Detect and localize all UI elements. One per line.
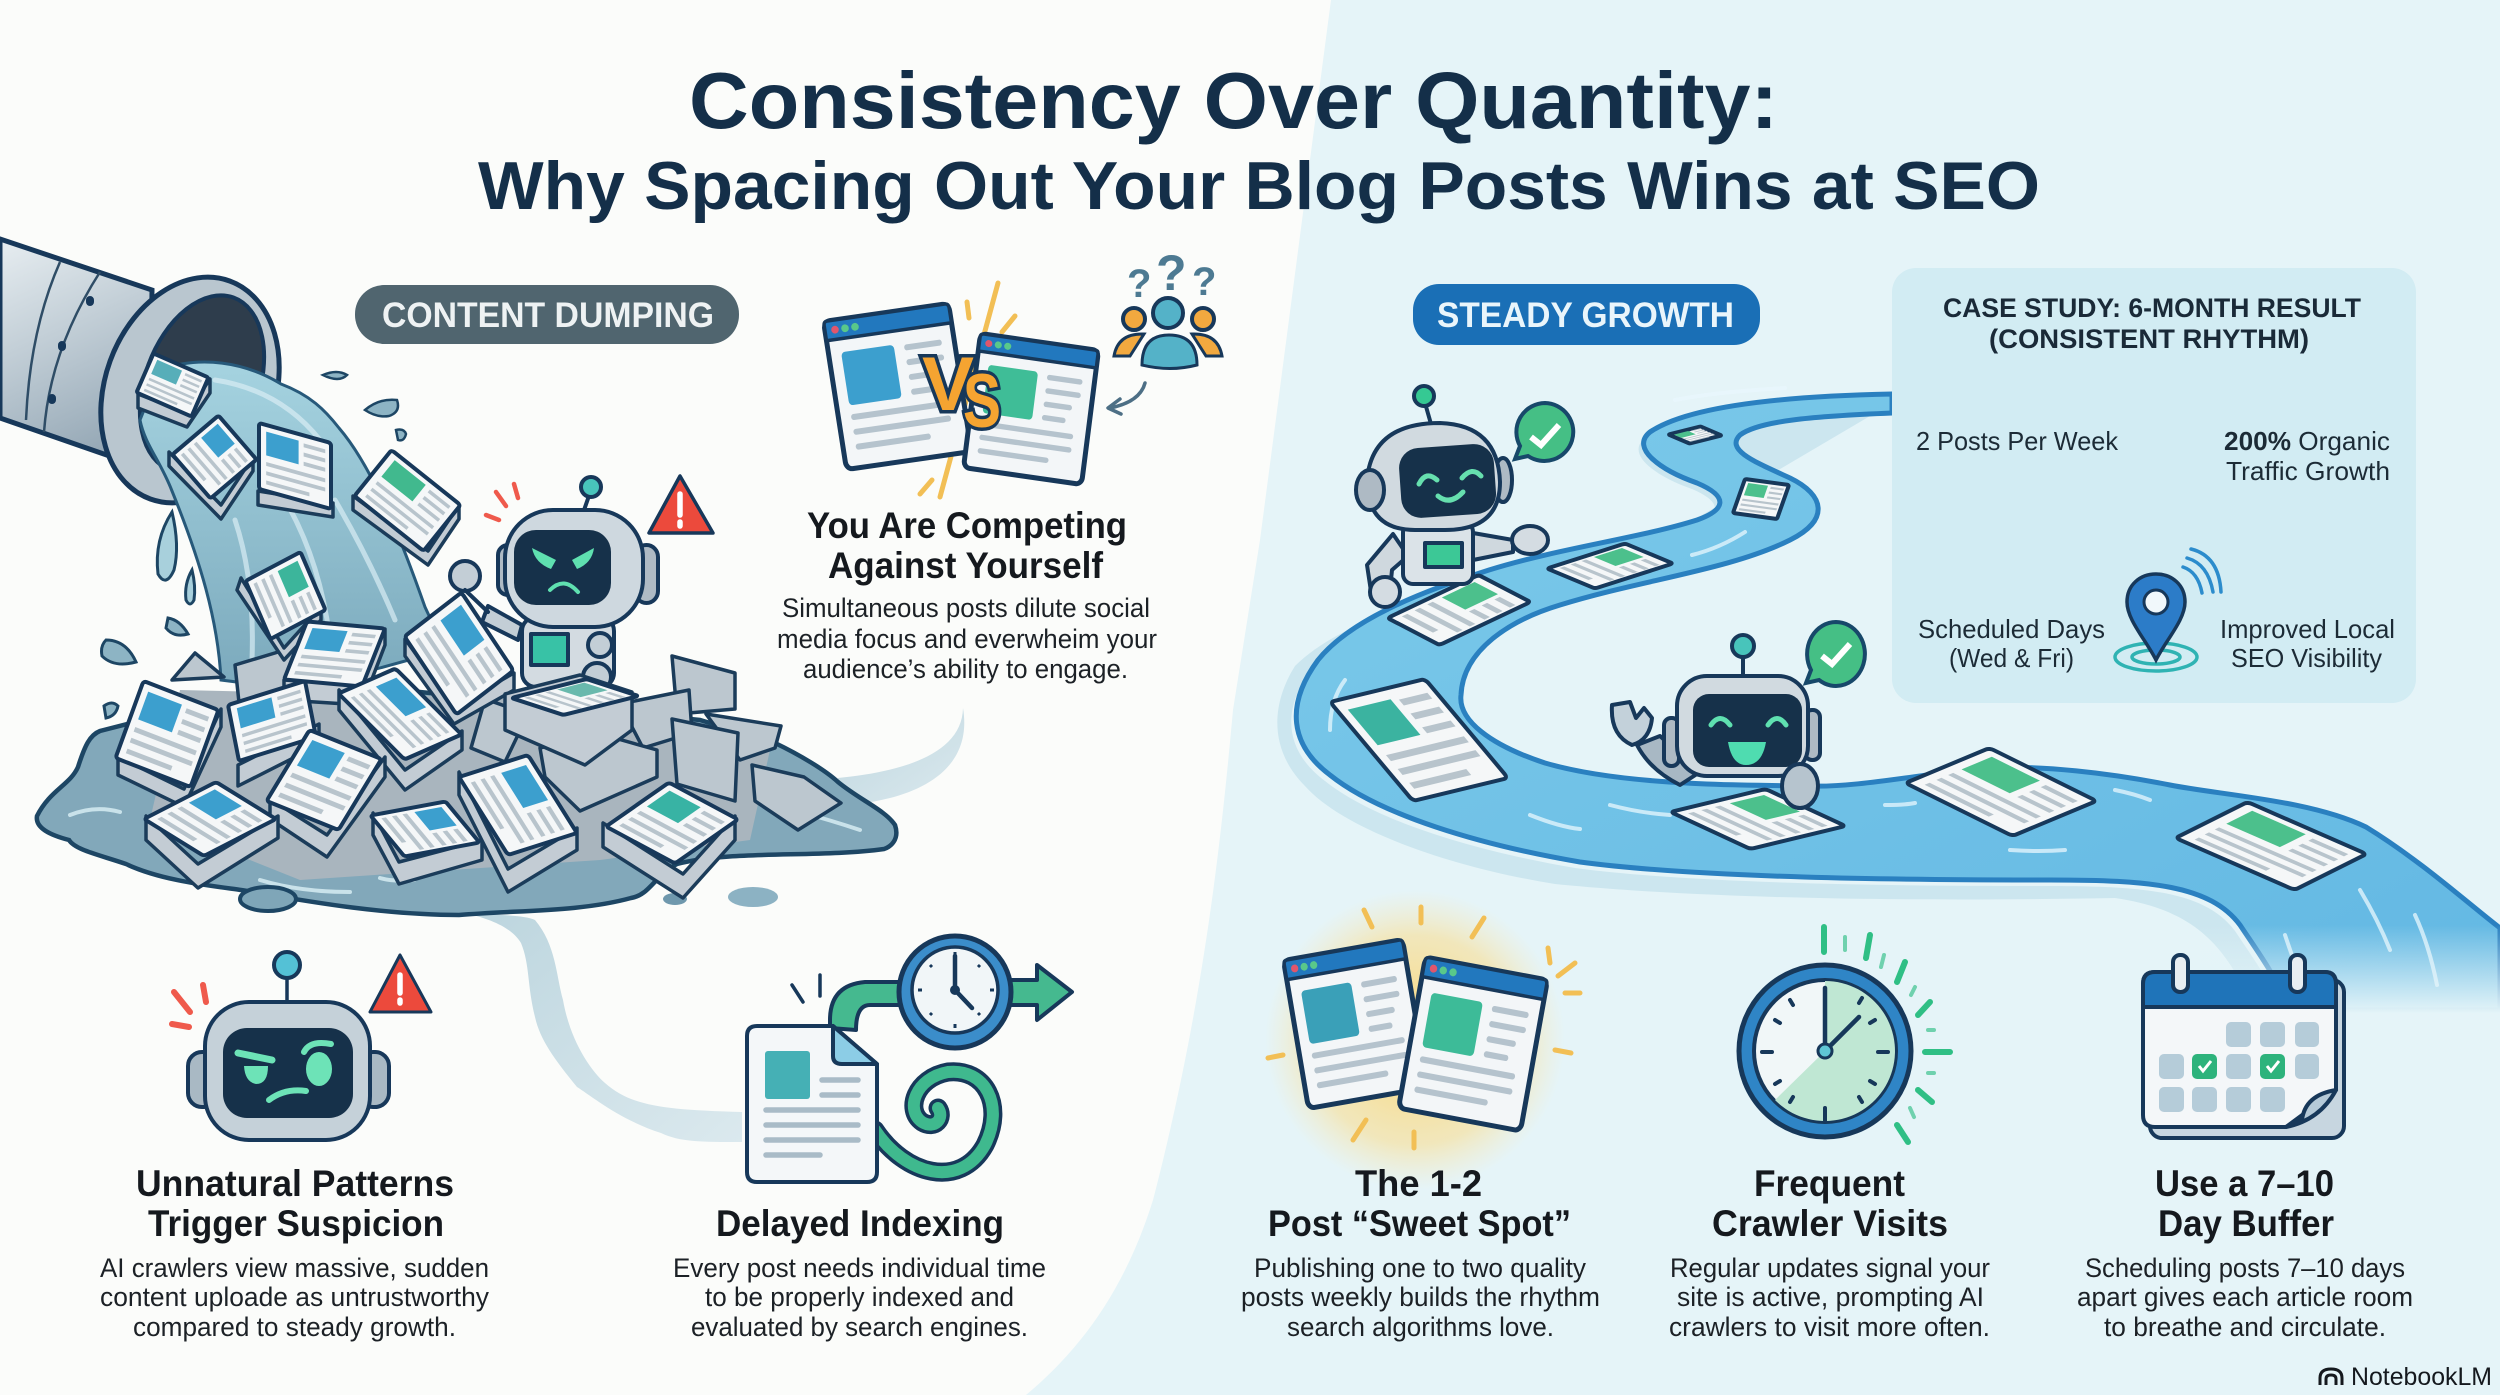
river fade	[2200, 925, 2500, 1013]
text: frequent crawler visits: Crawler Visits	[1712, 1203, 1948, 1244]
warning sign	[370, 955, 431, 1012]
icon: location pin	[2115, 549, 2221, 671]
text: sweet spot: The 1-2	[1355, 1163, 1482, 1204]
pipe collar	[70, 252, 310, 528]
icon: competing browsers versus: V	[922, 342, 974, 427]
stat: posts per week: 2 Posts Per Week	[1916, 426, 2119, 456]
puddle highlights	[70, 809, 860, 892]
panel heading: (CONSISTENT RHYTHM)	[1989, 324, 2309, 354]
text: unnatural patterns	[100, 1163, 489, 1342]
pipe mouth	[117, 278, 287, 490]
icon: confused audience	[1114, 245, 1222, 368]
text: sweet spot: posts weekly builds the rhythm	[1241, 1282, 1600, 1312]
text: frequent crawler visits: crawlers to visit more often.	[1669, 1312, 1990, 1342]
text: delayed indexing: to be properly indexed and	[705, 1282, 1014, 1312]
text: use a buffer: Scheduling posts 7–10 days	[2085, 1253, 2405, 1283]
icon: confused audience: ?	[1156, 245, 1187, 301]
text: unnatural patterns: Unnatural Patterns	[136, 1163, 454, 1204]
icon: frequent crawler clock	[1739, 927, 1950, 1142]
text: frequent crawler visits: site is active, prompting AI	[1677, 1282, 1984, 1312]
water stream	[140, 362, 445, 690]
post under lower robot	[1670, 789, 1846, 849]
pipe band	[26, 262, 100, 432]
robot: happy upper	[1356, 386, 1548, 607]
robot: happy lower	[1612, 635, 1820, 808]
panel: case study	[1892, 268, 2416, 703]
posts floating on river	[1330, 426, 2366, 890]
illustration: content dumping pipe and pile	[0, 239, 896, 915]
text: unnatural patterns: Trigger Suspicion	[148, 1203, 444, 1244]
ribbon: puddle to competing text	[820, 708, 964, 806]
text: sweet spot	[1241, 1163, 1600, 1342]
pill: content dumping	[355, 285, 739, 344]
pile of posts	[116, 354, 738, 898]
text: frequent crawler visits: Regular updates signal your	[1670, 1253, 1990, 1283]
pipe rivets	[52, 300, 90, 400]
text: you are competing against yourself	[777, 505, 1157, 684]
green swirl	[875, 1072, 993, 1172]
text: delayed indexing: evaluated by search engines.	[691, 1312, 1028, 1342]
title: Why Spacing Out Your Blog Posts Wins at SEO	[478, 148, 2040, 224]
icon: suspicious robot	[188, 952, 389, 1140]
text: use a buffer: Day Buffer	[2158, 1203, 2334, 1244]
text: you are competing against yourself: Against Yourself	[828, 545, 1104, 586]
stat: scheduled days	[1918, 614, 2105, 673]
pipe body	[0, 239, 152, 470]
stat: traffic growth	[2224, 426, 2390, 486]
stat: local seo: SEO Visibility	[2231, 643, 2382, 673]
title: Consistency Over Quantity:	[689, 56, 1778, 145]
icon: confused audience: ?	[1192, 260, 1216, 304]
rubble blocks	[150, 646, 841, 880]
text: you are competing against yourself: You Are Competing	[807, 505, 1127, 546]
alert sparks	[486, 484, 518, 520]
text: unnatural patterns: AI crawlers view massive, sudden	[100, 1253, 489, 1283]
puddle droplets	[102, 372, 778, 911]
text: unnatural patterns: content uploade as untrustworthy	[100, 1282, 489, 1312]
stat: scheduled days: (Wed & Fri)	[1949, 643, 2074, 673]
stat: local seo	[2220, 614, 2395, 673]
icon: confused audience: ?	[1127, 262, 1151, 306]
text: delayed indexing: Delayed Indexing	[716, 1203, 1004, 1244]
pill: steady growth	[1413, 284, 1760, 345]
text: use a buffer: apart gives each article room	[2077, 1282, 2413, 1312]
warning mark	[677, 494, 683, 526]
text: use a buffer: to breathe and circulate.	[2104, 1312, 2386, 1342]
river path	[1277, 388, 2500, 1016]
icon: sweet spot posts	[1265, 890, 1580, 1190]
panel heading: CASE STUDY: 6-MONTH RESULT	[1943, 293, 2361, 323]
clock	[899, 936, 1011, 1048]
text: unnatural patterns: compared to steady growth.	[133, 1312, 456, 1342]
text: sweet spot: Post “Sweet Spot”	[1268, 1203, 1571, 1244]
robot: angry	[450, 477, 658, 691]
icon: buffer calendar	[2143, 955, 2344, 1138]
text: delayed indexing: Every post needs individual time	[673, 1253, 1046, 1283]
stat: local seo: Improved Local	[2220, 614, 2395, 644]
text: frequent crawler visits: Frequent	[1754, 1163, 1905, 1204]
stat: traffic growth: 200% Organic	[2224, 426, 2390, 456]
warning mark	[397, 975, 403, 1003]
ribbon: puddle to delayed indexing	[465, 913, 742, 1142]
text: you are competing against yourself: Simultaneous posts dilute social	[782, 593, 1150, 623]
delay ticks	[792, 975, 820, 1002]
puddle	[37, 680, 896, 915]
alert sparks	[172, 985, 206, 1027]
activity ticks	[1824, 927, 1950, 1142]
warning sign	[649, 476, 713, 533]
text: sweet spot: search algorithms love.	[1287, 1312, 1554, 1342]
stat: scheduled days: Scheduled Days	[1918, 614, 2105, 644]
logo: notebooklm: NotebookLM	[2351, 1363, 2492, 1391]
bubble check: lower robot	[1806, 622, 1865, 686]
green arrow	[830, 965, 1072, 1030]
pill: steady growth: STEADY GROWTH	[1437, 296, 1734, 335]
panel heading	[1943, 293, 2361, 354]
bubble check: upper robot	[1515, 403, 1573, 461]
text: frequent crawler visits	[1669, 1163, 1990, 1342]
background: light blue right side	[1026, 0, 2500, 1395]
title	[478, 56, 2040, 224]
arrow: audience to browser	[1108, 383, 1145, 414]
icon: competing browsers versus: S	[963, 359, 1001, 444]
icon: delayed indexing	[747, 936, 1072, 1182]
text: use a buffer	[2077, 1163, 2413, 1342]
stat: traffic growth: Traffic Growth	[2226, 456, 2390, 486]
text: you are competing against yourself: media focus and everwheim your	[777, 624, 1157, 654]
text: sweet spot: Publishing one to two quality	[1254, 1253, 1586, 1283]
pill: content dumping: CONTENT DUMPING	[382, 296, 714, 335]
text: you are competing against yourself: audience’s ability to engage.	[803, 654, 1128, 684]
text: delayed indexing	[673, 1203, 1046, 1342]
text: use a buffer: Use a 7–10	[2155, 1163, 2334, 1204]
icon: competing browsers versus	[824, 283, 1098, 497]
page curl	[2286, 1090, 2336, 1127]
calendar cells	[2159, 1022, 2319, 1112]
document	[747, 1026, 877, 1182]
